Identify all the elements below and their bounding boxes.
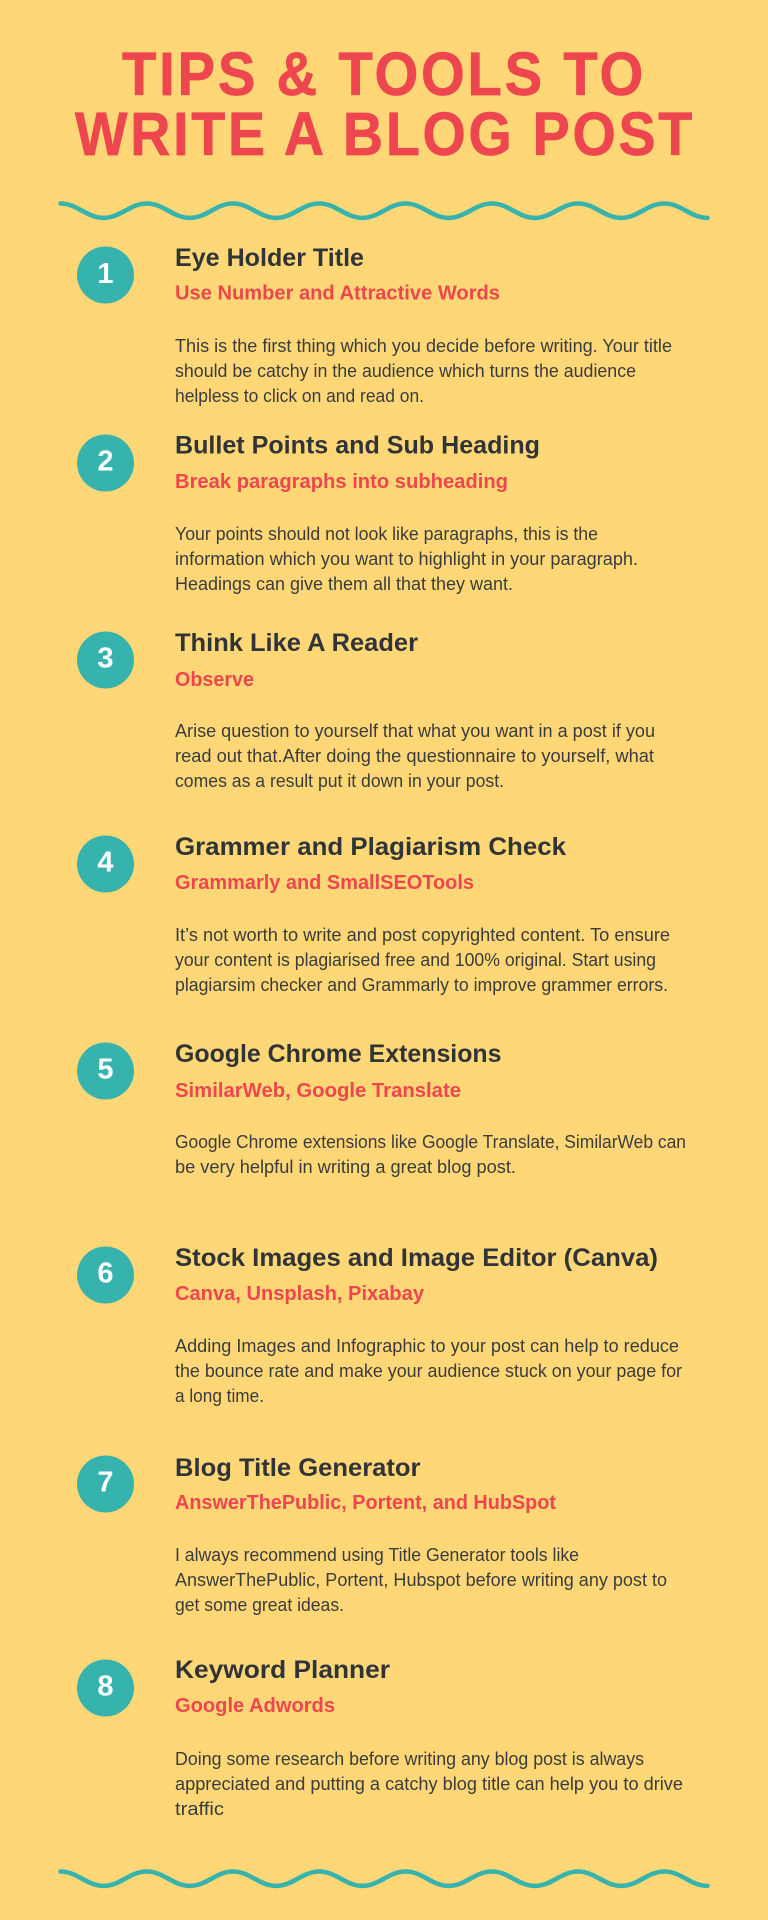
body text 8: traffic (175, 1799, 224, 1819)
heading 6: Stock Images and Image Editor (Canva) (175, 1244, 658, 1272)
body text 3: read out that.After doing the questionnaire to yourself, what (175, 746, 654, 766)
body text 5 (175, 1132, 686, 1177)
heading 4: Grammer and Plagiarism Check (175, 833, 566, 861)
title: TIPS & TOOLS TO (122, 40, 646, 108)
body text 5: be very helpful in writing a great blog post. (175, 1157, 516, 1177)
number badge 5 (77, 1042, 134, 1100)
number badge 1 (77, 246, 134, 304)
heading 3: Think Like A Reader (175, 629, 418, 657)
body text 5: Google Chrome extensions like Google Translate, SimilarWeb can (175, 1132, 686, 1152)
body text 8: appreciated and putting a catchy blog title can help you to drive (175, 1774, 683, 1794)
subheading 3: Observe (175, 669, 254, 691)
number badge 2: 2 (97, 446, 114, 478)
panel: step 5 (77, 1040, 686, 1177)
number badge 2 (77, 434, 134, 492)
title: WRITE A BLOG POST (75, 100, 695, 168)
wave divider: top (60, 204, 707, 218)
number badge 7: 7 (97, 1466, 114, 1498)
body text 7: AnswerThePublic, Portent, Hubspot before writing any post to (175, 1570, 667, 1590)
body text 6: Adding Images and Infographic to your post can help to reduce (175, 1336, 679, 1356)
subheading 1: Use Number and Attractive Words (175, 282, 500, 304)
number badge 7 (77, 1456, 134, 1512)
subheading 2: Break paragraphs into subheading (175, 471, 508, 493)
heading 8: Keyword Planner (175, 1656, 390, 1684)
heading 2: Bullet Points and Sub Heading (175, 432, 540, 460)
body text 8: Doing some research before writing any blog post is always (175, 1749, 644, 1769)
heading 7: Blog Title Generator (175, 1454, 421, 1482)
subheading 8: Google Adwords (175, 1695, 335, 1717)
heading 1: Eye Holder Title (175, 244, 364, 272)
panel: step 7 (77, 1454, 667, 1615)
body text 2: information which you want to highlight in your paragraph. (175, 549, 638, 569)
number badge 6: 6 (97, 1258, 114, 1290)
body text 7 (175, 1545, 667, 1615)
body text 1: This is the first thing which you decide before writing. Your title (175, 336, 672, 356)
subheading 7: AnswerThePublic, Portent, and HubSpot (175, 1492, 556, 1514)
number badge 5: 5 (97, 1054, 114, 1086)
panel: step 8 (77, 1656, 683, 1819)
title (75, 40, 695, 168)
number badge 8: 8 (97, 1670, 114, 1702)
number badge 8 (77, 1660, 134, 1716)
panel: step 6 (77, 1244, 682, 1406)
wave divider: bottom (60, 1872, 707, 1886)
body text 1: helpless to click on and read on. (175, 386, 424, 406)
body text 2: Your points should not look like paragraphs, this is the (175, 524, 598, 544)
body text 4: It’s not worth to write and post copyrighted content. To ensure (175, 925, 670, 945)
heading 5: Google Chrome Extensions (175, 1040, 502, 1068)
body text 6: a long time. (175, 1386, 264, 1406)
body text 7: I always recommend using Title Generator tools like (175, 1545, 579, 1565)
body text 8 (175, 1749, 683, 1819)
body text 3: comes as a result put it down in your post. (175, 771, 504, 791)
number badge 6 (77, 1246, 134, 1304)
body text 2: Headings can give them all that they want. (175, 574, 513, 594)
body text 1 (175, 336, 672, 406)
number badge 3: 3 (97, 642, 114, 674)
body text 6 (175, 1336, 682, 1406)
body text 7: get some great ideas. (175, 1595, 344, 1615)
body text 4 (175, 925, 670, 995)
body text 6: the bounce rate and make your audience stuck on your page for (175, 1361, 682, 1381)
number badge 4: 4 (97, 846, 114, 878)
panel: step 1 (77, 244, 672, 406)
panel: step 2 (77, 432, 638, 594)
body text 4: plagiarsim checker and Grammarly to improve grammer errors. (175, 975, 668, 995)
subheading 5: SimilarWeb, Google Translate (175, 1080, 461, 1102)
number badge 1: 1 (97, 258, 114, 290)
body text 1: should be catchy in the audience which turns the audience (175, 361, 636, 381)
body text 4: your content is plagiarised free and 100% original. Start using (175, 950, 656, 970)
body text 3: Arise question to yourself that what you want in a post if you (175, 721, 655, 741)
panel: step 3 (77, 629, 655, 791)
panel: step 4 (77, 833, 670, 995)
number badge 3 (77, 632, 134, 688)
subheading 4: Grammarly and SmallSEOTools (175, 872, 474, 894)
subheading 6: Canva, Unsplash, Pixabay (175, 1283, 425, 1305)
number badge 4 (77, 836, 134, 892)
body text 2 (175, 524, 638, 594)
body text 3 (175, 721, 655, 791)
